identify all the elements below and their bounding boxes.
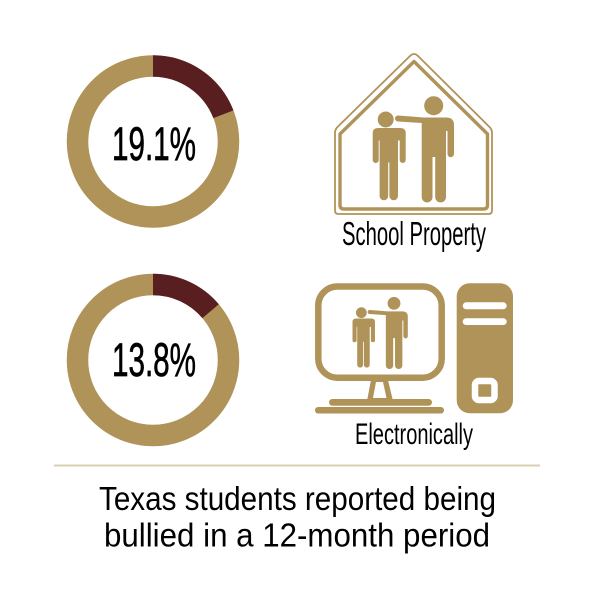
donut chart: school property 19.1%	[78, 66, 228, 217]
monitor	[318, 286, 442, 378]
value: 19.1%: 19.1%	[112, 117, 196, 170]
caption	[99, 480, 496, 554]
donut chart: electronically 13.8%	[78, 284, 228, 436]
figure: smaller student	[373, 112, 406, 200]
computer tower	[457, 283, 513, 413]
value: 13.8%: 13.8%	[112, 333, 196, 386]
caption: Texas students reported being	[99, 480, 496, 517]
caption: bullied in a 12-month period	[104, 516, 490, 554]
label: School Property: School Property	[342, 215, 486, 252]
icon: desktop computer with bullying figures	[315, 283, 513, 414]
icon: school zone sign with bullying figures	[335, 54, 492, 214]
monitor stand	[367, 380, 393, 401]
label: Electronically: Electronically	[355, 418, 473, 451]
figure: taller student on screen	[368, 297, 408, 369]
figure: smaller student on screen	[353, 307, 375, 368]
figure: taller student pointing	[395, 96, 454, 202]
